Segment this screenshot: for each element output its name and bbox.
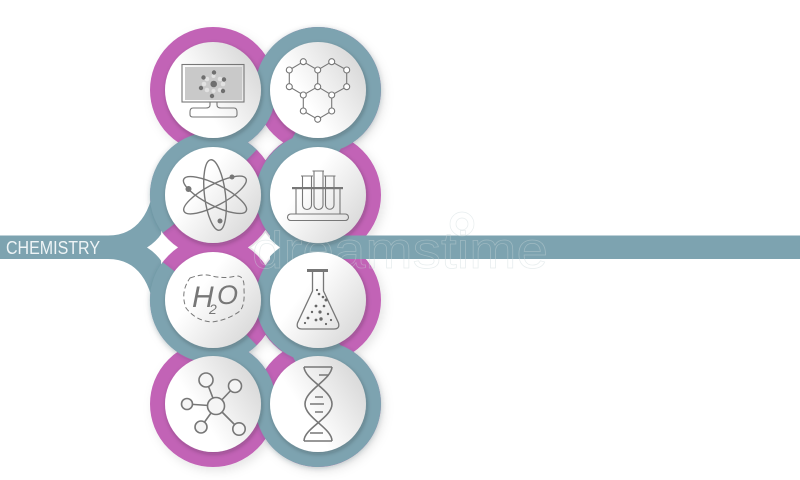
icon: erlenmeyer flask — [297, 269, 339, 329]
icon: DNA helix — [304, 367, 332, 441]
teal connector: left band with flare — [0, 200, 161, 295]
icon: hexagon molecule — [286, 59, 350, 122]
icon: atom — [179, 158, 251, 232]
icon: computer monitor with molecule — [182, 64, 244, 117]
teal ribbon arcs — [158, 35, 373, 459]
white diamond right — [251, 233, 280, 262]
white diamond left — [147, 233, 178, 262]
icon: H2O in dashed blob: H — [192, 281, 214, 314]
icon: H2O in dashed blob: O — [217, 280, 238, 310]
icon: H2O in dashed blob: 2 — [208, 301, 217, 317]
teal horizontal band — [270, 236, 800, 259]
heading: chemistry label: CHEMISTRY — [6, 238, 100, 258]
icon: network molecule — [182, 373, 245, 435]
magenta rings — [158, 35, 373, 459]
icon: test tubes in rack — [288, 171, 348, 220]
watermark: dreamstime — [252, 222, 548, 280]
icon: H2O in dashed blob — [184, 275, 244, 322]
white discs — [165, 42, 366, 452]
